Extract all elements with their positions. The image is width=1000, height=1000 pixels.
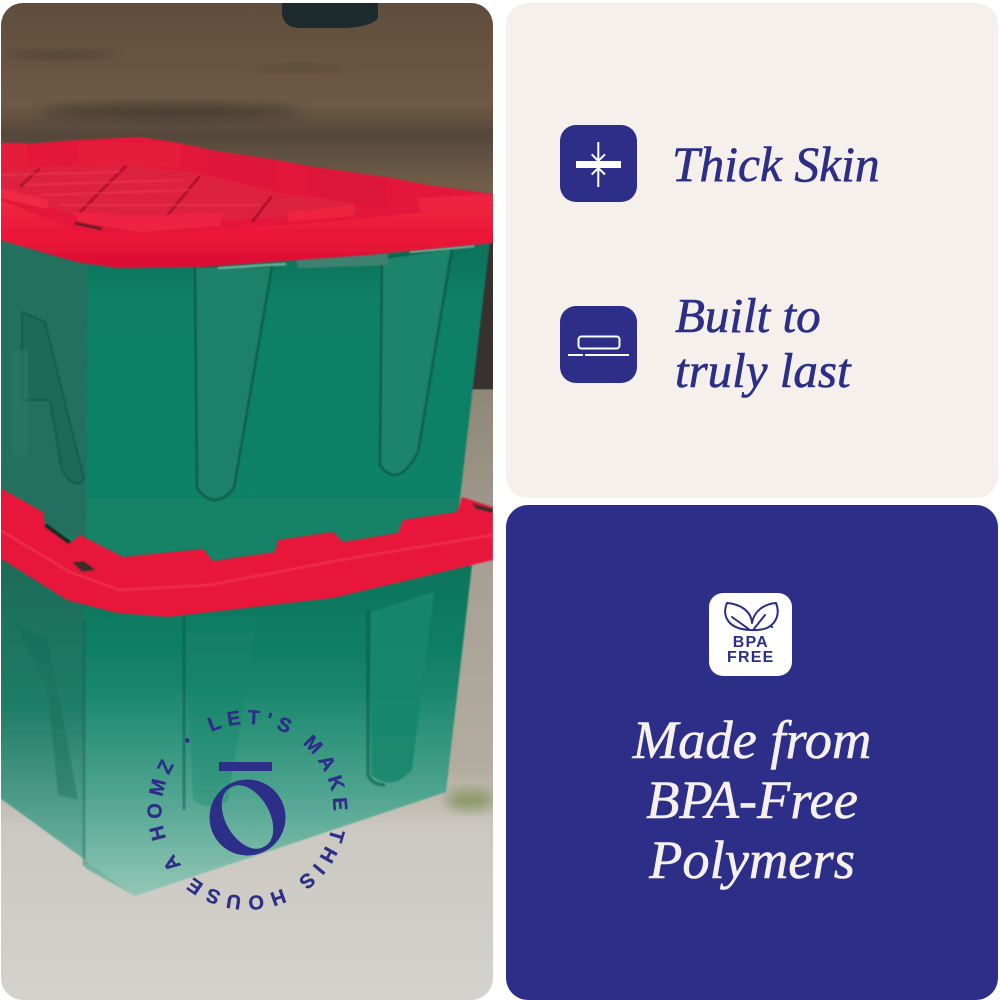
heading: built to truly last: [675, 288, 852, 398]
heading: made from BPA-free polymers: Made from: [633, 709, 871, 770]
icon: BPA free badge: FREE: [727, 649, 775, 666]
panel: BPA free: [506, 505, 998, 1000]
logo mark: [210, 762, 286, 856]
heading: made from BPA-free polymers: [632, 709, 871, 890]
heading: built to truly last: truly last: [675, 342, 851, 398]
lower box body: [0, 555, 472, 896]
icon: BPA free badge: [709, 593, 792, 676]
icon: thick skin: [560, 125, 637, 202]
icon: built to last: [560, 306, 637, 383]
heading: made from BPA-free polymers: Polymers: [649, 829, 855, 890]
heading: thick skin: Thick Skin: [672, 137, 880, 192]
upper red lid: [0, 137, 493, 268]
panel: product features: [506, 3, 998, 498]
heading: built to truly last: Built to: [675, 288, 821, 343]
lower red lid: [0, 488, 493, 617]
heading: made from BPA-free polymers: BPA-Free: [646, 769, 858, 830]
panel: product photo of stacked storage boxes: [1, 3, 493, 1000]
upper box body: [0, 235, 490, 565]
icon: BPA free badge: BPA: [733, 634, 769, 651]
brand badge: [147, 710, 348, 910]
circular slogan: LET'S MAKE THIS HOUSE A HOMZ: [147, 710, 348, 910]
